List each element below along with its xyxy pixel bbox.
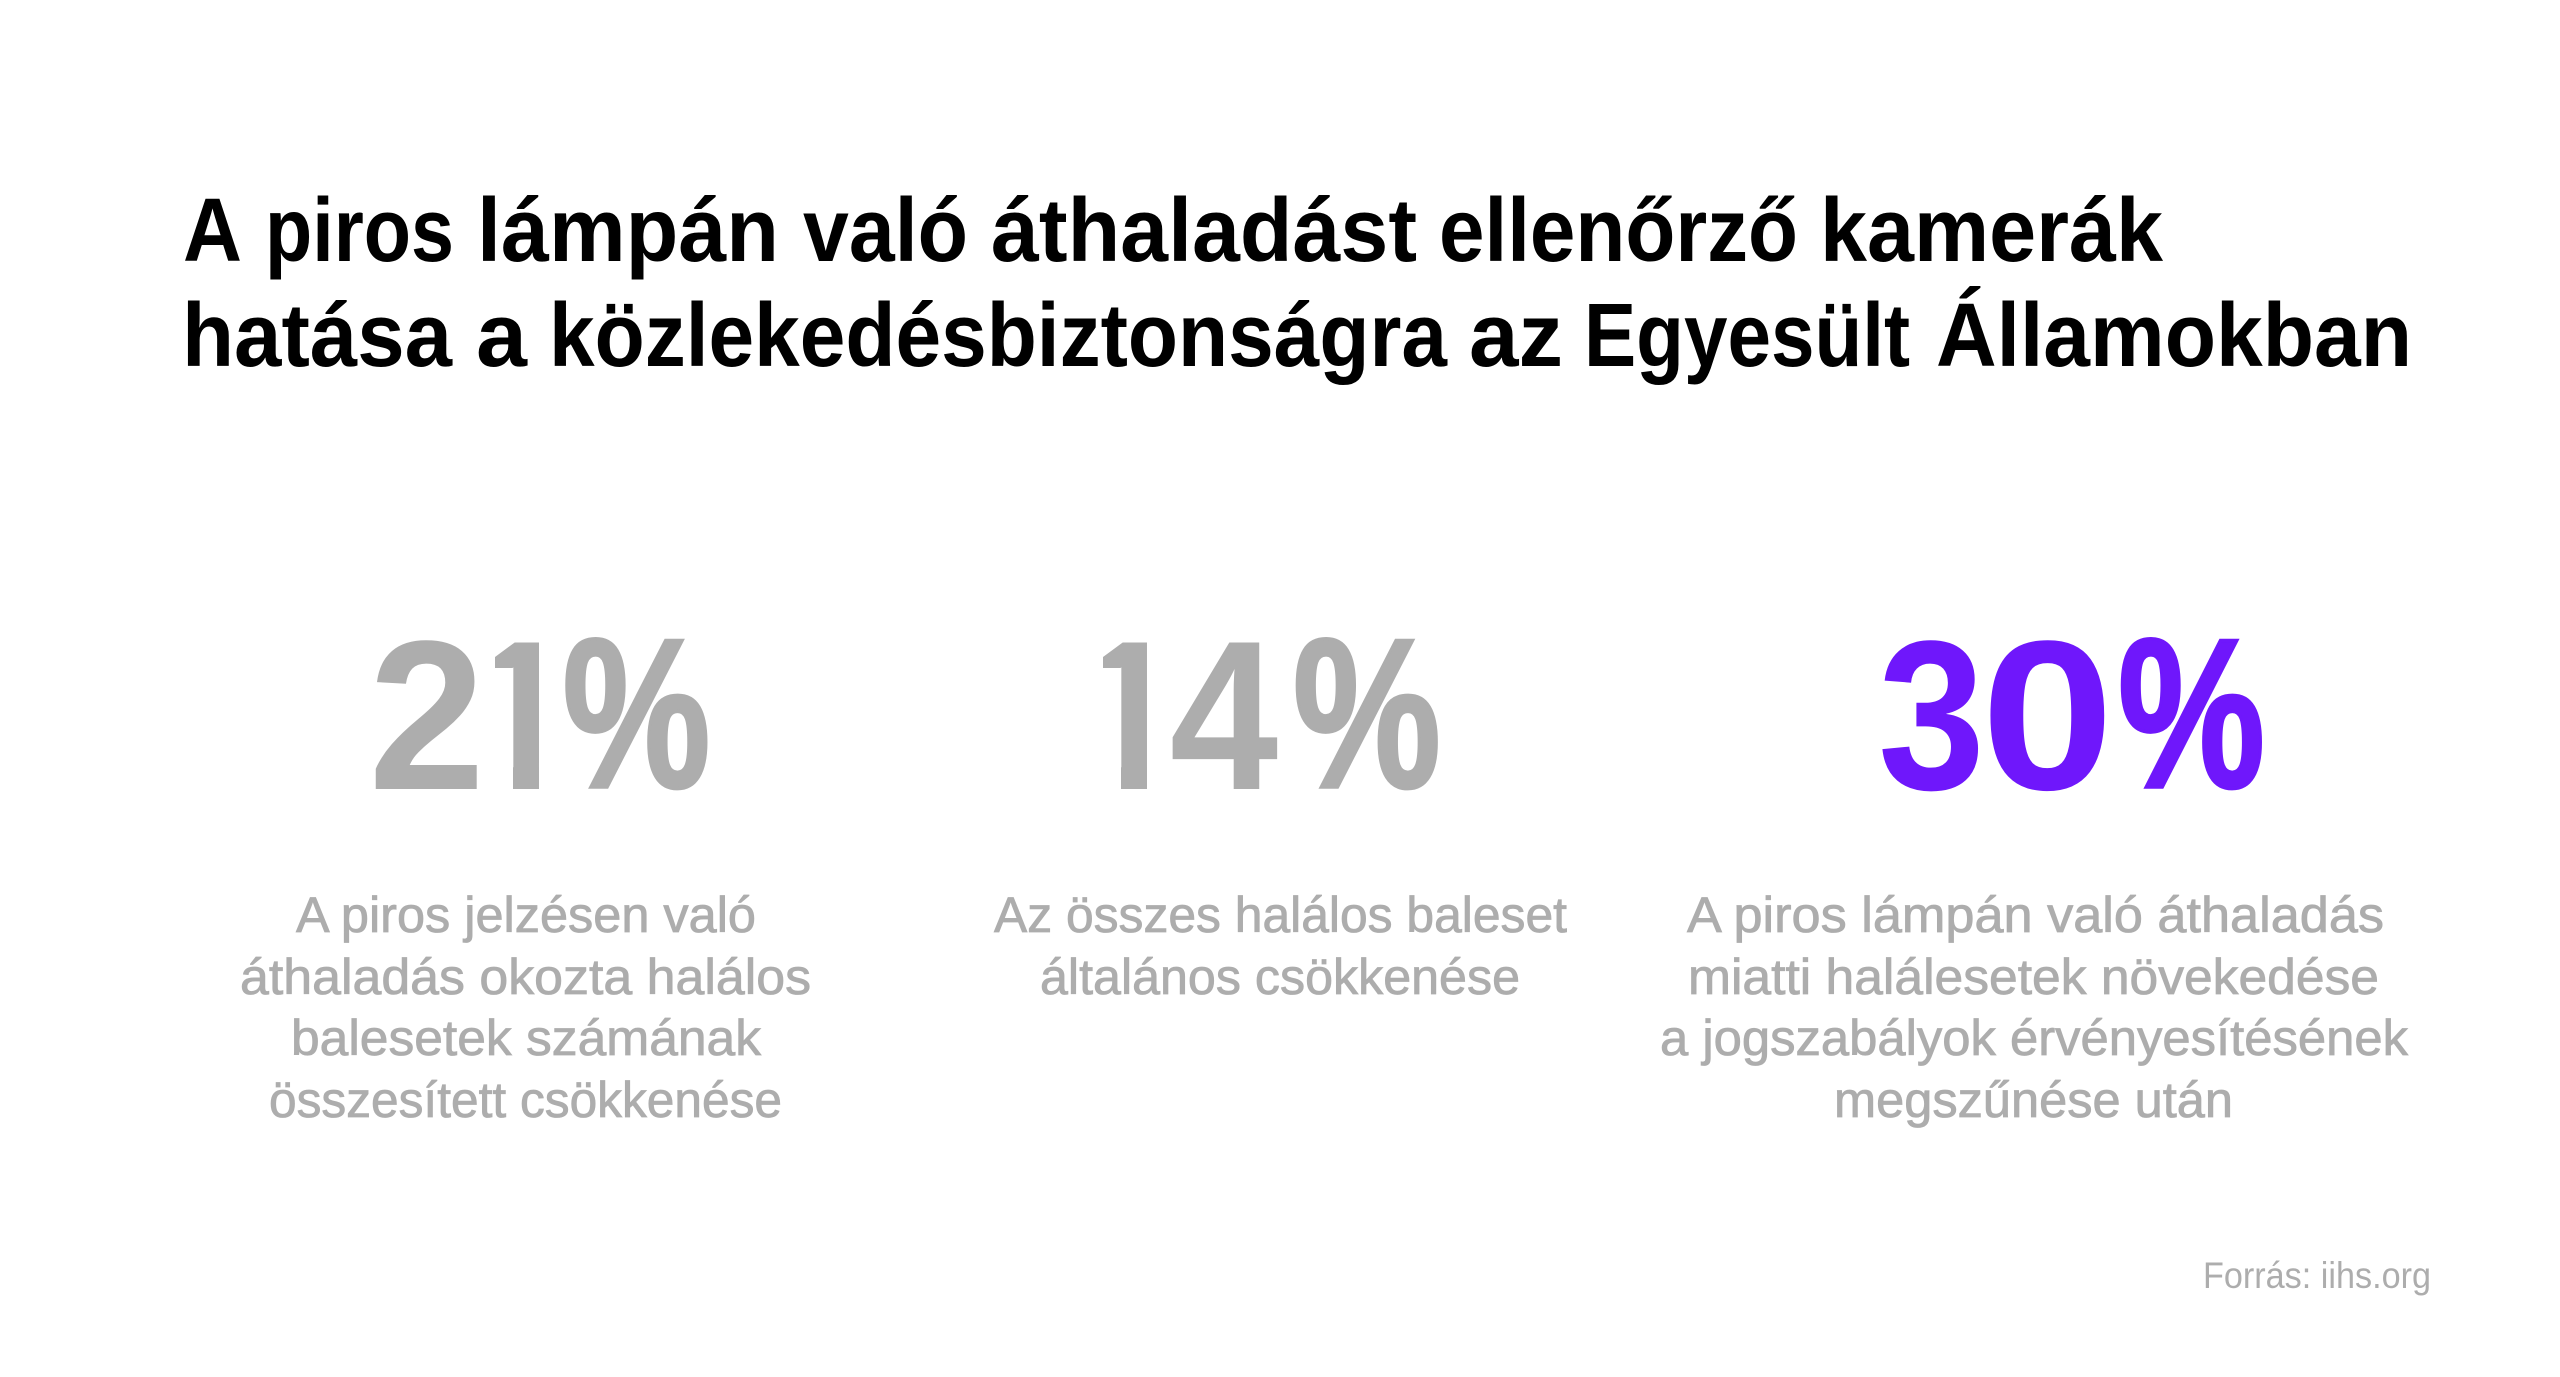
title: kamerák <box>1820 181 2164 281</box>
number: 14%: 4 <box>1170 597 1278 835</box>
source note: Forrás: iihs.org <box>2203 1255 2431 1296</box>
number: 14%: 1 <box>1078 597 1182 835</box>
stat column: 14% <box>994 637 1567 995</box>
title: lámpán <box>477 181 779 281</box>
description: 30%: miatti halálesetek növekedése <box>1688 949 2379 1005</box>
title: Egyesült <box>1584 286 1910 386</box>
description: 14% <box>994 887 1567 1005</box>
description: 30%: a jogszabályok érvényesítésének <box>1660 1010 2409 1066</box>
title: áthaladást <box>991 181 1417 281</box>
number: 30%: 3 <box>1878 597 1985 835</box>
description: 14%: általános csökkenése <box>1040 949 1520 1005</box>
description: 21% <box>240 887 811 1128</box>
stat column: 21% <box>242 637 810 1118</box>
title <box>182 181 2412 386</box>
title: való <box>803 181 968 281</box>
description: 14%: Az összes halálos baleset <box>994 887 1567 943</box>
title: A <box>183 181 242 281</box>
title: a <box>476 286 528 386</box>
number: 14% <box>1103 637 1438 790</box>
title: hatása <box>182 286 453 386</box>
title: közlekedésbiztonságra <box>549 286 1448 386</box>
description: 21%: balesetek számának <box>291 1010 762 1066</box>
title: az <box>1469 286 1563 386</box>
number: 21%: 2 <box>368 597 485 835</box>
title: Államokban <box>1936 285 2412 386</box>
description: 30%: A piros lámpán való áthaladás <box>1687 887 2384 943</box>
number: 21%: % <box>562 595 710 833</box>
description: 21%: A piros jelzésen való <box>296 887 756 943</box>
number: 21%: 1 <box>470 597 574 835</box>
description: 30%: megszűnése után <box>1834 1072 2233 1128</box>
stat column: 30% <box>1660 595 2409 1128</box>
title: ellenőrző <box>1439 181 1798 281</box>
description: 21%: összesített csökkenése <box>269 1072 782 1128</box>
number: 30%: % <box>2118 595 2265 833</box>
number: 21% <box>376 637 708 790</box>
title: piros <box>265 181 454 281</box>
number: 14%: % <box>1293 595 1441 833</box>
description: 30% <box>1660 887 2409 1128</box>
number: 30% <box>1878 595 2265 835</box>
description: 21%: áthaladás okozta halálos <box>240 949 811 1005</box>
number: 30%: 0 <box>1981 597 2114 835</box>
